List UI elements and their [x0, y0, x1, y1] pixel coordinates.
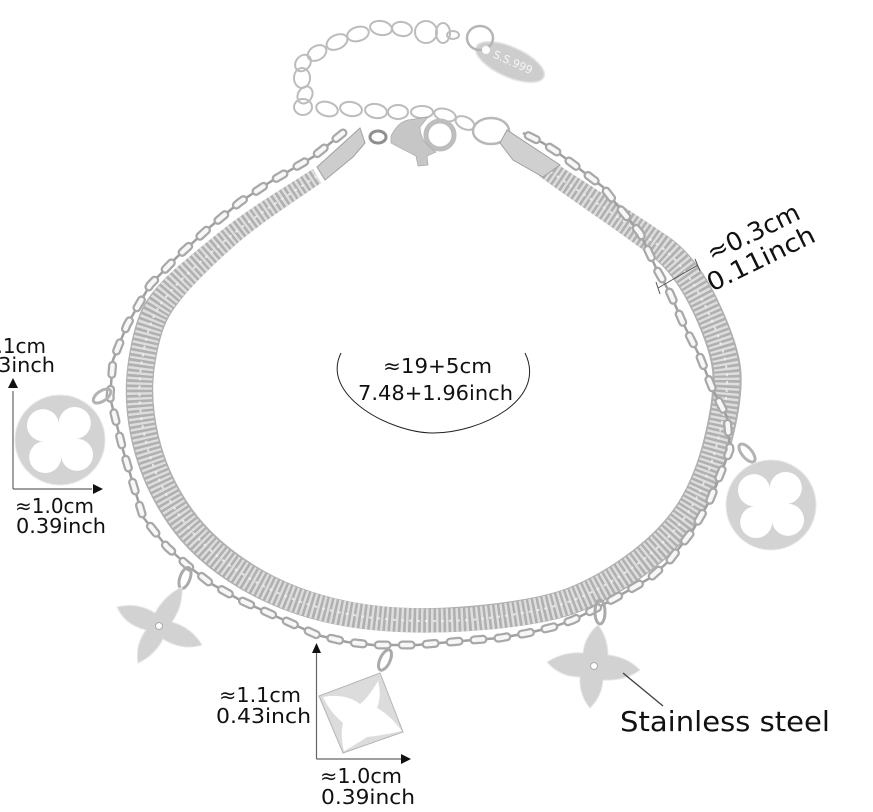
label: chain width: 0.11inch [702, 220, 820, 297]
pointer line: material [623, 673, 663, 706]
arrows: left coin dimensions [13, 391, 92, 489]
label: left coin width: ≈1.0cm [15, 494, 94, 518]
label: bracelet length: ≈19+5cm [383, 354, 492, 378]
label: diamond height: 0.43inch [216, 704, 311, 728]
pendant: left flower star [117, 566, 202, 663]
pendant: right flower star [547, 600, 640, 708]
end ring [473, 118, 509, 144]
label: left coin width: 0.39inch [16, 514, 106, 538]
label: chain width: ≈0.3cm [702, 197, 805, 267]
label: diamond width: ≈1.0cm [320, 764, 402, 788]
label: chain width [702, 197, 820, 297]
label: material: Stainless steel [620, 705, 830, 738]
label: diamond height [216, 683, 311, 728]
thin cable chain [110, 133, 730, 645]
label: diamond width: 0.39inch [321, 785, 415, 809]
tag with ring [467, 26, 550, 91]
pendant: hollow diamond [319, 648, 403, 753]
label: diamond width [320, 764, 415, 809]
arc: bracelet length [337, 353, 530, 433]
label: left coin width [15, 494, 106, 538]
label: bracelet length: 7.48+1.96inch [358, 381, 513, 405]
lobster clasp [370, 117, 454, 166]
right end cap [500, 130, 560, 177]
extender chain [292, 19, 477, 133]
measure line: chain width [656, 259, 700, 294]
tag with ring: S.S.999 [491, 48, 535, 77]
label: left coin height [0, 334, 55, 377]
arrowheads: left coin [8, 378, 103, 494]
label: diamond height: ≈1.1cm [219, 683, 301, 707]
pendant: left clover coin [15, 386, 113, 485]
arrowheads: diamond [312, 643, 411, 764]
snake chain [126, 166, 742, 633]
arrows: diamond dimensions [316, 652, 402, 759]
label: bracelet length [358, 354, 513, 405]
left end cap [317, 128, 365, 180]
pendant: right clover coin [726, 441, 816, 550]
